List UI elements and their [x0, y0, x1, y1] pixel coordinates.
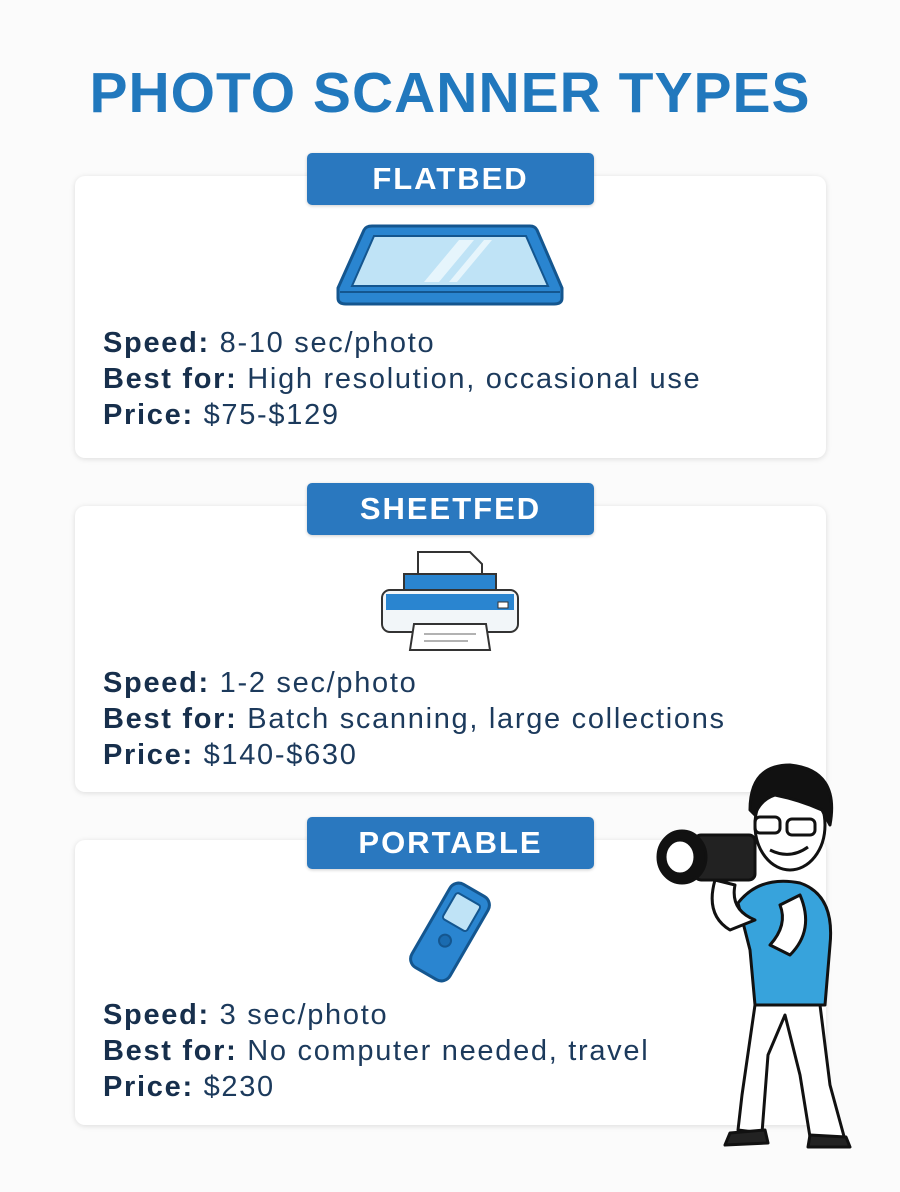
panel: flatbed: [75, 176, 826, 458]
text: flatbed details: Price: $75-$129: [103, 399, 340, 431]
text: portable details: Price: $230: [103, 1071, 275, 1103]
text: sheetfed details: Best for: Batch scanning, large collections: [103, 703, 726, 735]
label: flatbed: [307, 153, 594, 205]
icon: flatbed scanner: [336, 224, 564, 306]
text: flatbed details: [103, 327, 701, 431]
panel: sheetfed: [75, 506, 826, 792]
text: sheetfed details: Speed: 1-2 sec/photo: [103, 667, 417, 699]
label: sheetfed: [307, 483, 594, 535]
label: flatbed: FLATBED: [372, 161, 529, 196]
illustration: photographer: [656, 764, 852, 1148]
panel: portable: [75, 840, 826, 1125]
icon: portable scanner: [409, 882, 491, 982]
text: sheetfed details: [103, 667, 726, 771]
text: sheetfed details: Price: $140-$630: [103, 739, 358, 771]
text: flatbed details: Speed: 8-10 sec/photo: [103, 327, 435, 359]
text: portable details: [103, 999, 649, 1103]
label: portable: PORTABLE: [358, 825, 543, 860]
label: sheetfed: SHEETFED: [360, 491, 541, 526]
title: PHOTO SCANNER TYPES: [89, 61, 811, 125]
text: flatbed details: Best for: High resolution, occasional use: [103, 363, 701, 395]
text: portable details: Speed: 3 sec/photo: [103, 999, 388, 1031]
label: portable: [307, 817, 594, 869]
icon: sheetfed scanner: [381, 551, 519, 651]
text: portable details: Best for: No computer needed, travel: [103, 1035, 649, 1067]
